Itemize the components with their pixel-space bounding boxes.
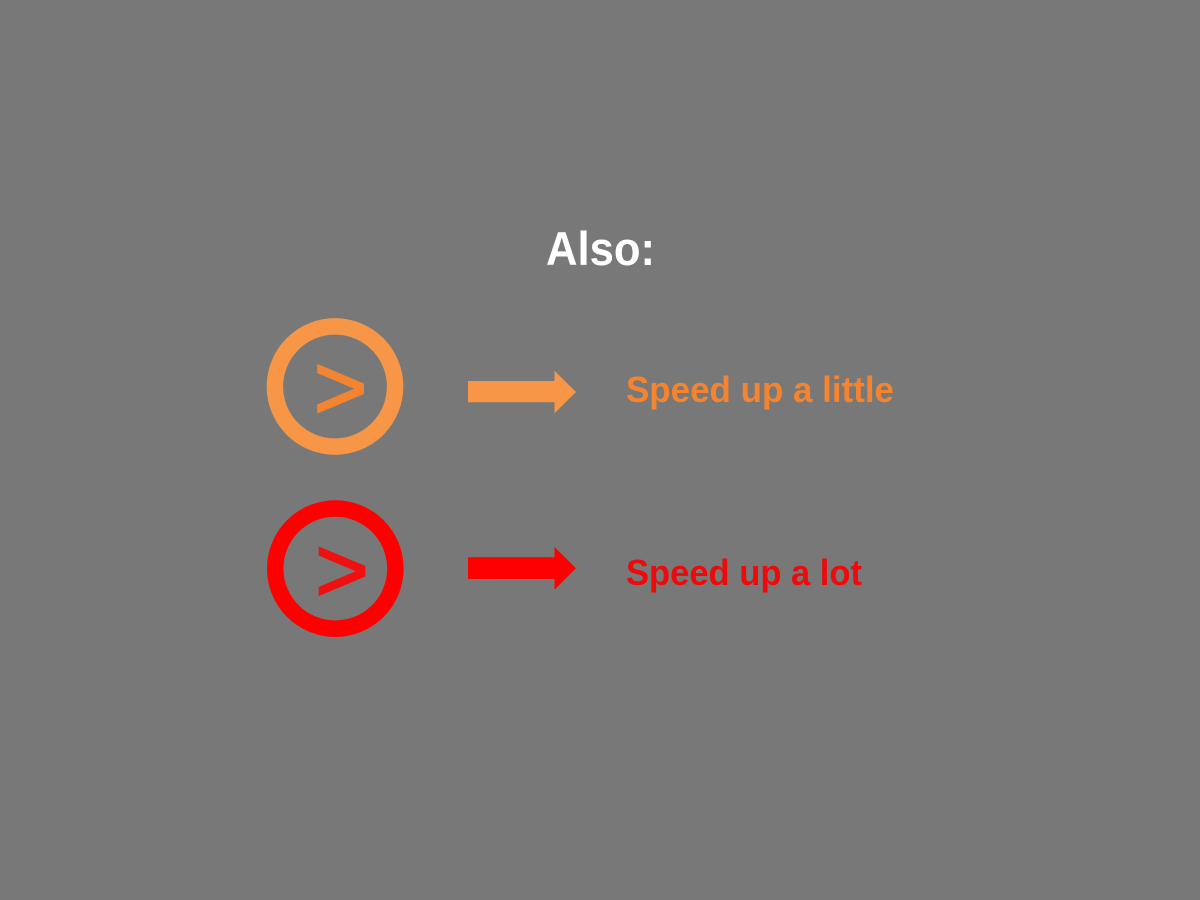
label: speed up a lot: Speed up a lot [626,552,862,593]
icon: red circle with greater-than sign: > [315,520,369,622]
row: speed up a lot [275,508,862,629]
row: speed up a little [275,326,894,447]
icon: red circle with greater-than sign [275,508,395,629]
arrow: orange [468,371,576,413]
icon: orange circle with greater-than sign [275,326,395,447]
title: Also: [546,222,655,275]
label: speed up a little: Speed up a little [626,369,894,410]
icon: orange circle with greater-than sign: > [314,337,367,439]
arrow: red [468,547,576,590]
